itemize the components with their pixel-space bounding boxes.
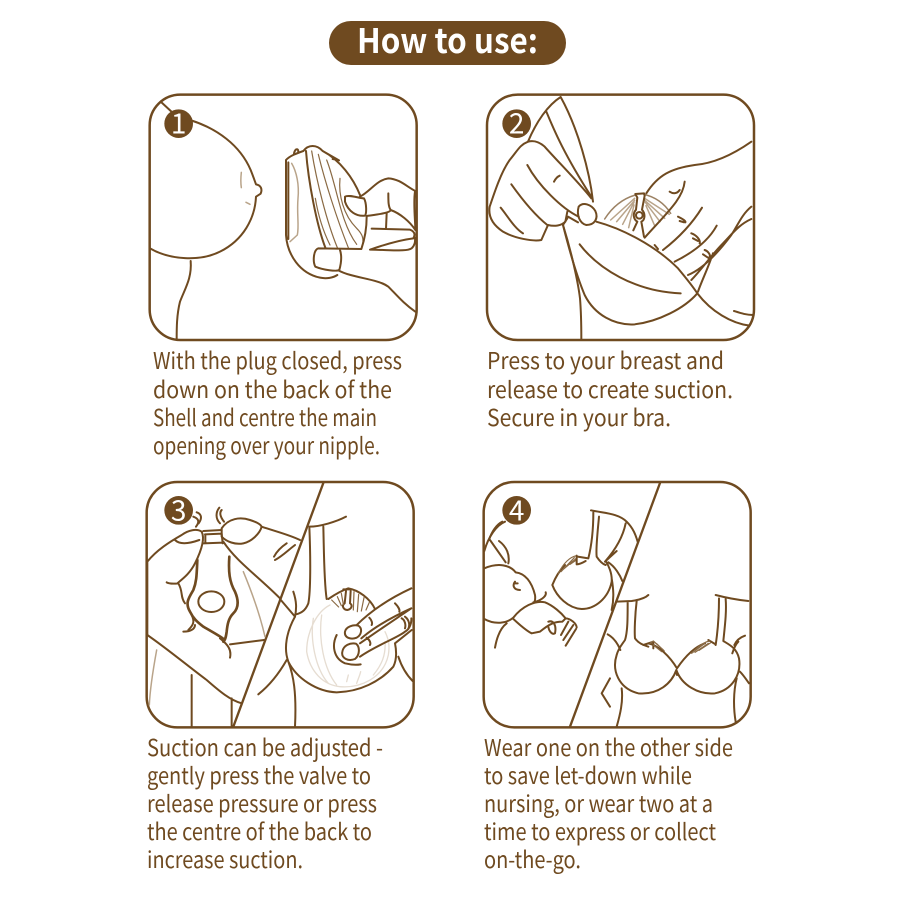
nursing baby (484, 522, 577, 648)
caption: step 1: opening over your nipple. (153, 427, 380, 461)
caption: step 3: the centre of the back to (147, 813, 372, 847)
back shell ribs (312, 151, 363, 248)
fingertip nails (342, 625, 361, 660)
pressing fingers (334, 588, 411, 665)
diagonal divider (233, 483, 323, 727)
panel: step 4 illustration (484, 482, 751, 727)
fingers holding valve (147, 530, 203, 635)
title pill: How to use: (357, 14, 538, 63)
lower bra (602, 595, 749, 727)
shell flange inner curve (290, 163, 298, 242)
caption: step 1: Shell and centre the main (153, 399, 377, 433)
caption: step 1: With the plug closed, press (153, 342, 402, 376)
caption: step 3: increase suction. (147, 841, 303, 875)
shell dome left edge (577, 556, 586, 564)
step number badge 2: 2 (509, 103, 524, 143)
shell dome ribs (611, 198, 669, 228)
caption: step 2: release to create suction. (487, 371, 733, 405)
caption: step 2: Press to your breast and (487, 342, 724, 376)
shell dome left (558, 556, 577, 573)
caption: step 4: on-the-go. (484, 841, 581, 875)
badge connector (489, 522, 502, 540)
shell dome ribs (332, 592, 369, 612)
step number badge 1: 1 (171, 103, 186, 143)
hand (314, 178, 415, 312)
caption: step 4: time to express or collect (484, 813, 716, 847)
step number badge 3: 3 (171, 489, 186, 529)
caption: step 2: Secure in your bra. (487, 399, 671, 433)
shells lower (650, 641, 710, 653)
hand lower part (147, 635, 264, 727)
bra cup (563, 217, 697, 324)
thumb (578, 204, 597, 225)
caption: step 4: to save let-down while (484, 757, 692, 791)
breast outline (150, 102, 261, 258)
bra strap (528, 97, 593, 202)
caption: step 2 (487, 342, 733, 433)
valve with press marks (193, 508, 224, 543)
step number badge 4: 4 (509, 489, 524, 529)
step number badge 1 (164, 103, 193, 143)
step number badge 4 (502, 489, 531, 529)
nipple areola marks (241, 172, 250, 204)
caption: step 3: release pressure or press (147, 785, 377, 819)
torso and breast (258, 517, 413, 727)
shell dome (328, 588, 375, 610)
caption: step 3: gently press the valve to (147, 757, 371, 791)
step number badge 3 (164, 489, 193, 529)
step number badge 2 (502, 103, 531, 143)
left hand (489, 141, 591, 240)
shell dome (605, 194, 671, 219)
panel: step 2 illustration (487, 95, 754, 340)
caption: step 4: nursing, or wear two at a (484, 785, 713, 819)
caption: step 3: Suction can be adjusted - (147, 729, 383, 763)
panel: step 1 illustration (150, 95, 417, 340)
body lines (563, 225, 753, 339)
right hand (645, 142, 751, 292)
upper bra and breast (552, 510, 638, 610)
shell valve body (188, 557, 238, 642)
shell device (286, 146, 360, 278)
panel: step 3 illustration (147, 482, 414, 727)
caption: step 1 (153, 342, 402, 461)
caption: step 4: Wear one on the other side (484, 729, 733, 763)
caption: step 4 (484, 729, 733, 875)
ghost shell under skin (307, 605, 389, 687)
shell valve (633, 193, 645, 237)
caption: step 1: down on the back of the (153, 371, 392, 405)
caption: step 3 (147, 729, 383, 875)
diagonal divider (570, 483, 660, 727)
torso line (177, 261, 191, 339)
